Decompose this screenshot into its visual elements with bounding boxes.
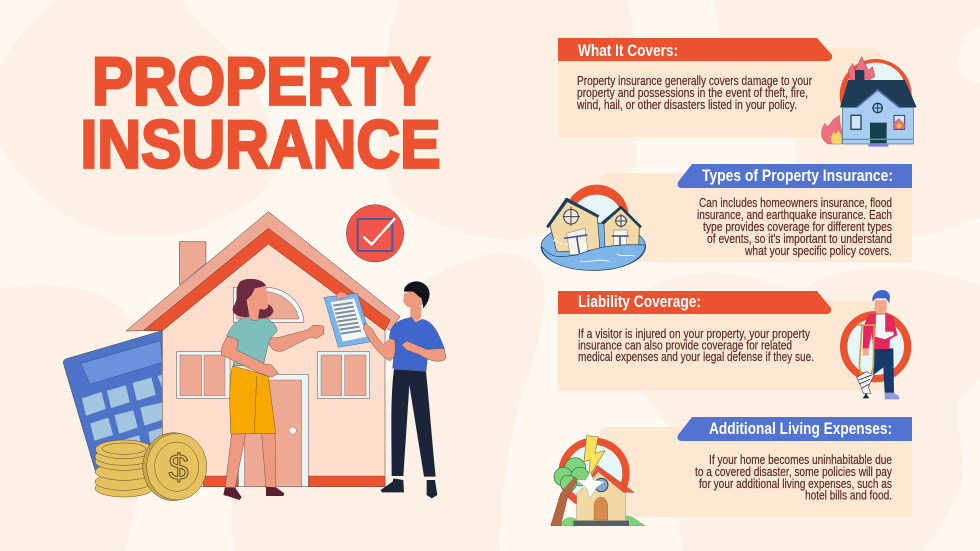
text block: insurance can also provide coverage for related — [578, 338, 792, 352]
text block: Can includes homeowners insurance, flood — [699, 195, 892, 210]
text block — [576, 73, 813, 112]
heading bar: Types of Property Insurance: — [702, 167, 893, 185]
text block: type provides coverage for different types — [703, 219, 892, 234]
text block: wind, hail, or other disasters listed in your policy. — [576, 97, 797, 112]
heading bar: Additional Living Expenses: — [709, 420, 892, 438]
text block: insurance, and earthquake insurance. Each — [697, 207, 892, 222]
house — [126, 212, 400, 487]
title: PROPERTY — [92, 44, 430, 120]
text block: If a visitor is injured on your property, your property — [578, 326, 810, 341]
heading bar: What It Covers: — [578, 42, 678, 60]
icon: clipboard — [324, 292, 372, 347]
panel: liability coverage — [558, 290, 908, 399]
heading bar: Liability Coverage: — [578, 293, 701, 311]
text block: property and possessions in the event of theft, fire, — [577, 85, 808, 100]
text block: medical expenses and your legal defense if they sue. — [578, 349, 814, 364]
panel: what it covers — [558, 38, 917, 147]
text block: to a covered disaster, some policies will pay — [695, 464, 892, 479]
icon: checkmark badge — [346, 205, 404, 262]
man with clipboard — [324, 281, 446, 498]
icon: coins: $ — [169, 446, 189, 487]
title: INSURANCE — [80, 106, 440, 182]
heading bar — [678, 417, 912, 441]
text block: hotel bills and food. — [805, 488, 892, 502]
text block: of events, so it's important to understand — [707, 231, 892, 246]
text block: Property insurance generally covers damage to your — [577, 73, 813, 88]
panel: types of property insurance — [541, 164, 912, 270]
icon: calculator — [63, 331, 162, 470]
icon: coins — [95, 433, 207, 501]
icon: injured man on crutch — [844, 290, 908, 399]
icon: storm damaged house — [551, 436, 645, 526]
text block: for your additional living expenses, such as — [699, 476, 892, 491]
heading bar — [558, 38, 832, 61]
title — [80, 44, 440, 182]
heading bar — [678, 164, 912, 188]
icon: flooded houses — [541, 185, 646, 270]
panel: additional living expenses — [551, 417, 912, 526]
text block: If your home becomes uninhabitable due — [709, 452, 892, 467]
heading bar — [558, 291, 831, 314]
text block — [697, 195, 892, 258]
woman — [221, 279, 324, 500]
text block: what your specific policy covers. — [744, 243, 892, 258]
icon: house on fire — [822, 57, 917, 147]
illustration: house, couple, calculator and coins — [63, 205, 446, 501]
text block — [695, 452, 892, 502]
text block — [578, 326, 814, 364]
